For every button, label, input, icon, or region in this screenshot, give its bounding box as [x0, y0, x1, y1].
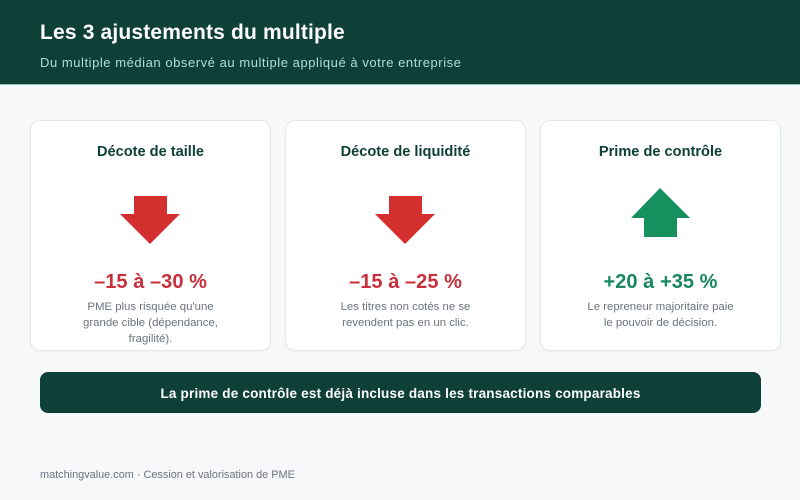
title: Les 3 ajustements du multiple — [40, 21, 345, 44]
icon: red down arrow — [120, 196, 180, 244]
icon: red down arrow — [375, 196, 435, 244]
description: PME plus risquée qu'une — [87, 301, 214, 313]
footer: matchingvalue.com · Cession et valorisation de PME — [40, 469, 295, 481]
description: revendent pas en un clic. — [342, 317, 469, 329]
value: −15 à −25 %: –15 à –25 % — [349, 271, 462, 293]
icon: green up arrow — [631, 188, 690, 237]
callout banner — [40, 372, 761, 413]
header band — [0, 0, 800, 85]
description: fragilité). — [129, 333, 172, 345]
description — [587, 301, 734, 329]
description — [341, 301, 470, 329]
description: le pouvoir de décision. — [604, 317, 717, 329]
panel: décote de taille — [30, 120, 271, 351]
heading: décote de liquidité: Décote de liquidité — [341, 144, 470, 160]
description: Les titres non cotés ne se — [341, 301, 470, 313]
description: Le repreneur majoritaire paie — [587, 301, 734, 313]
heading: prime de contrôle: Prime de contrôle — [599, 144, 722, 160]
panel: prime de contrôle — [540, 120, 781, 351]
heading: décote de taille: Décote de taille — [97, 144, 204, 160]
description — [83, 301, 218, 345]
panel: décote de liquidité — [285, 120, 526, 351]
value: −15 à −30 %: –15 à –30 % — [94, 271, 207, 293]
subtitle: Du multiple médian observé au multiple appliqué à votre entreprise — [40, 55, 461, 70]
value: +20 à +35 %: +20 à +35 % — [604, 271, 717, 293]
description: grande cible (dépendance, — [83, 317, 218, 329]
callout banner: La prime de contrôle est déjà incluse dans les transactions comparables — [160, 386, 641, 401]
